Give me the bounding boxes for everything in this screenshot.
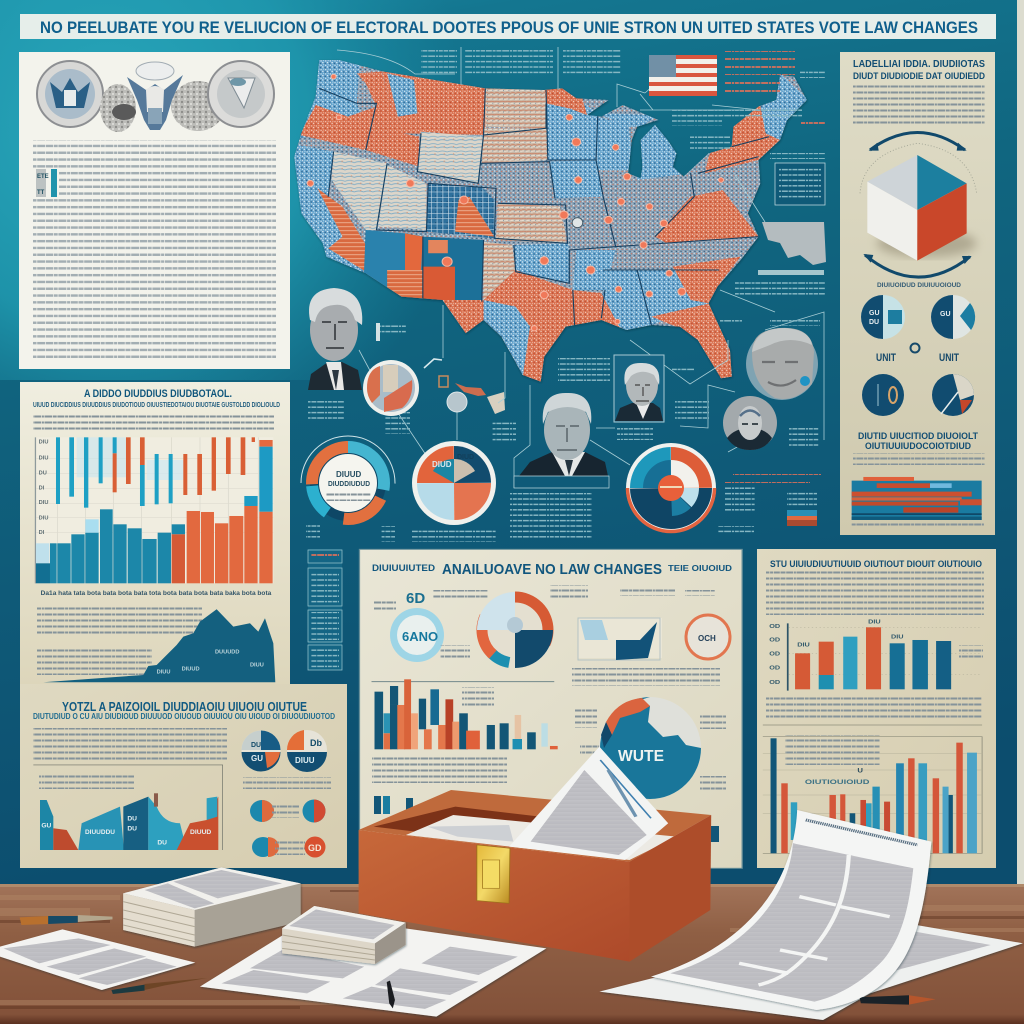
text block: middle right <box>572 668 720 686</box>
pie chart: center: DIUD <box>432 460 452 469</box>
text block: lower <box>853 453 985 465</box>
bars behind box <box>374 796 719 842</box>
panel: right column cube <box>840 52 995 535</box>
panel: analysis of law changes <box>359 549 742 868</box>
text block: chart notes <box>39 772 134 789</box>
heading: DIUDT DIUDIODIE DAT OIUDIEDD <box>853 71 985 82</box>
area chart: colored terrain: DU <box>127 816 137 823</box>
area chart: mountain <box>43 609 275 682</box>
donut chart: left <box>298 433 398 533</box>
captions: right of framed portrait <box>558 358 709 440</box>
text block: chart axis <box>851 521 984 526</box>
pie chart: right <box>626 443 716 533</box>
clasp <box>477 845 510 903</box>
bar chart: votes by year: DIU <box>39 455 48 461</box>
map: United States states <box>291 57 812 390</box>
icon: upright pen on sheet <box>387 981 395 1008</box>
badge: round blue stat <box>390 608 444 662</box>
text block: lower notes <box>37 646 152 675</box>
panel: right district charts <box>757 549 996 868</box>
panel: bar chart and mountain chart <box>20 382 290 685</box>
panel: US map <box>291 47 826 670</box>
heading: ANAILUOAVE NO LAW CHANGES <box>442 561 662 578</box>
bar chart: tall narrow bars: OIUTIOUIOIUD <box>805 780 869 786</box>
label: cube caption: DIUIUOIDUD DIUIUUOIOUD <box>877 282 961 289</box>
divider map inset <box>578 618 662 660</box>
area chart: colored terrain: DU <box>157 840 167 847</box>
pie: bottom left <box>862 374 904 416</box>
subheading: UIUUD DIUCIDDIUS DIUUDDIUS DIUDOTIOUD OIUUSTIEDOTAIOU DIUOTAIE GUSTOLDD DIOLIOULD <box>33 400 280 409</box>
portrait: center large <box>514 393 609 488</box>
document: paper stack small <box>282 906 406 964</box>
inset: alaska shape <box>762 222 826 265</box>
icon: pill pair upper <box>250 800 326 822</box>
badge: small circle stat <box>686 615 730 659</box>
bar chart: seven bars: OD <box>769 624 781 630</box>
badge: round blue stat: 6ANO <box>402 629 438 644</box>
area chart: colored terrain: DIUUD <box>190 829 212 836</box>
icon: pen lower left <box>111 978 207 994</box>
heading: YOTZL A PAIZOIOIL DIUDDIAOIU UIUOIU OIUTUE <box>62 699 307 714</box>
pie: top left: GU <box>869 310 880 317</box>
text block: intro <box>33 728 227 760</box>
donut chart: left: DIUDDIUDUD <box>328 481 370 488</box>
flag: United States <box>649 55 717 96</box>
icon: small globe <box>447 392 467 412</box>
pie: upper right: DIUU <box>295 756 315 765</box>
document: back sheets right <box>599 915 1023 1020</box>
icon: left seal <box>37 61 103 127</box>
heading: lower <box>858 431 978 451</box>
bar chart: seven bars <box>769 619 982 691</box>
heading: lower: DIUTID UIUCITIOD DIUOIOLT <box>858 431 978 442</box>
pie chart: center: DIUD <box>457 454 474 461</box>
pie: top left: DU <box>869 319 879 326</box>
caption: statesman left <box>308 323 410 434</box>
heading: LADELLIAI IDDIA. DIUDIIOTAS <box>853 59 985 70</box>
stat: 60 percent: 6D <box>406 590 425 607</box>
text block: below center portrait <box>510 493 592 538</box>
area chart: mountain: DIUUD <box>182 667 200 673</box>
bar chart: votes by year: DU <box>39 471 47 477</box>
labels: unit: UNIT <box>939 352 959 364</box>
heading <box>372 561 732 578</box>
document: sheet under small stack <box>200 928 546 1017</box>
portrait: statesman left <box>308 288 362 390</box>
right wall edge <box>1017 0 1024 886</box>
labels: unit: UNIT <box>876 352 896 364</box>
inset: hawaii islands <box>424 359 505 414</box>
labels: unit <box>876 344 959 364</box>
pie: upper left: GU <box>251 754 263 763</box>
document: large curled sheet <box>651 810 931 1010</box>
document: paper stack large <box>123 867 301 947</box>
pie: top right: GU <box>940 311 950 318</box>
icon: cube diagram <box>860 132 977 277</box>
text block: left of area chart <box>37 606 202 637</box>
icon: central eagle <box>100 62 225 132</box>
pie: upper left <box>242 730 280 772</box>
annotation box: east coast <box>775 163 825 205</box>
sidebar: text list <box>308 549 342 670</box>
side note <box>959 645 983 659</box>
annotations: south east <box>720 270 825 324</box>
small captions: right of bars <box>462 687 726 790</box>
heading: STU UIUIUDIUUTIUUID OIUTIOUT DIOUIT OIUTIOUIO <box>770 559 982 570</box>
text block: below bars <box>372 755 507 783</box>
mini stacked image <box>787 510 817 526</box>
badge: round map medallion <box>363 360 419 416</box>
captions: lower center <box>306 420 516 542</box>
portrait: round large right <box>746 320 820 400</box>
area chart: mountain: DIUU <box>250 663 264 669</box>
map pins <box>307 74 724 331</box>
text block: middle <box>766 696 982 718</box>
area chart: colored terrain: GU <box>41 822 52 829</box>
text block: body copy <box>33 140 276 358</box>
bar chart: tall narrow bars: U <box>857 768 863 774</box>
annotations: top columns <box>421 50 621 75</box>
bar chart: seven bars: DIU <box>797 642 810 648</box>
chart: stacked bars <box>852 477 982 520</box>
captions: lower right of map <box>718 425 821 534</box>
icon: pen upper left <box>20 915 112 925</box>
area chart: colored terrain: DU <box>127 826 137 833</box>
pie chart: WUTE globe: WUTE <box>618 748 664 765</box>
icon: right seal <box>208 61 274 127</box>
table: wooden desk <box>0 884 1024 1024</box>
bar chart: seven bars: OD <box>769 665 781 671</box>
icon: small legend box: TT <box>37 190 45 196</box>
bar chart: grouped <box>372 679 558 749</box>
bar chart: seven bars: OD <box>769 651 781 657</box>
ballot sheet <box>509 747 668 860</box>
icon: small legend box: ETE <box>37 174 49 180</box>
heading <box>853 59 985 82</box>
connector lines <box>337 47 824 488</box>
donut chart: left: DIUUD <box>336 470 362 479</box>
bar chart: seven bars: DIU <box>868 619 881 625</box>
donut chart: center panel <box>468 583 562 677</box>
background glow upper left <box>0 0 480 380</box>
document: flat sheet left <box>0 929 195 990</box>
bar chart: seven bars: DIU <box>891 634 904 640</box>
pie: bottom right <box>932 374 974 416</box>
pie: upper right: Db <box>310 738 322 748</box>
pie: upper right <box>287 730 327 772</box>
pie: top left <box>861 295 905 339</box>
heading: DIUIUUIUTED <box>372 563 436 573</box>
portrait: framed right <box>614 355 664 422</box>
bar chart: votes by year <box>35 437 273 597</box>
heading: TEIE OIUOIUD <box>668 563 732 573</box>
area chart: colored terrain: DIUUDDU <box>85 829 115 836</box>
area chart: mountain: DIUU <box>157 669 170 675</box>
text block: top <box>766 571 984 615</box>
bar chart: votes by year: DIU <box>39 500 48 506</box>
panel: seals and declaration text <box>19 52 290 369</box>
bar chart: seven bars: OD <box>769 637 781 643</box>
badge: small circle stat: OCH <box>698 634 716 643</box>
subheading: DIUTUDIUD O CU AIU DIUDIOUD DIUUUOD OIUOUD OIUUIOU OIU UIOUD OI DIUOUDIUOTOD <box>33 712 335 721</box>
icon: pill pair lower: GD <box>308 843 322 853</box>
bar chart: tall narrow bars <box>763 725 982 853</box>
bar chart: votes by year: DI <box>39 485 45 491</box>
area chart: colored terrain <box>33 765 223 850</box>
text block: pie caption <box>243 777 331 789</box>
icon: small legend box <box>33 168 59 199</box>
portrait: round small right <box>723 396 777 450</box>
text block: chart legend <box>785 735 880 765</box>
bar chart: seven bars: OD <box>769 680 781 686</box>
pie: upper left: DU <box>251 742 261 749</box>
stat: 60 percent <box>374 590 488 610</box>
captions: upper left of panel <box>440 585 715 659</box>
bar chart: votes by year: DIU <box>39 439 48 445</box>
annotations: right of flag <box>672 51 825 159</box>
bar chart: votes by year: Da1a hata tata bota bata bota bata tota bota bata bota bata baka bota bota <box>41 590 272 597</box>
bar chart: votes by year: DI <box>39 530 45 536</box>
icon: pill pair lower <box>252 836 326 858</box>
pie: top right <box>931 295 975 339</box>
icon: pen right <box>860 995 936 1005</box>
pie chart: WUTE globe <box>599 697 701 799</box>
bar chart: votes by year: DIU <box>39 515 48 521</box>
area chart: mountain: DUUUDD <box>215 649 239 655</box>
text block: intro <box>33 413 274 431</box>
heading: lower: OIUTIUUIUDOCOIOTDIUD <box>865 441 971 451</box>
ballot box <box>359 747 711 962</box>
heading: A DIDDO DIUDDIUS DIUDBOTAOL. <box>84 388 232 400</box>
panel: vote a national overview <box>20 684 347 868</box>
text block: intro <box>853 84 985 124</box>
pie chart: center <box>412 441 496 525</box>
